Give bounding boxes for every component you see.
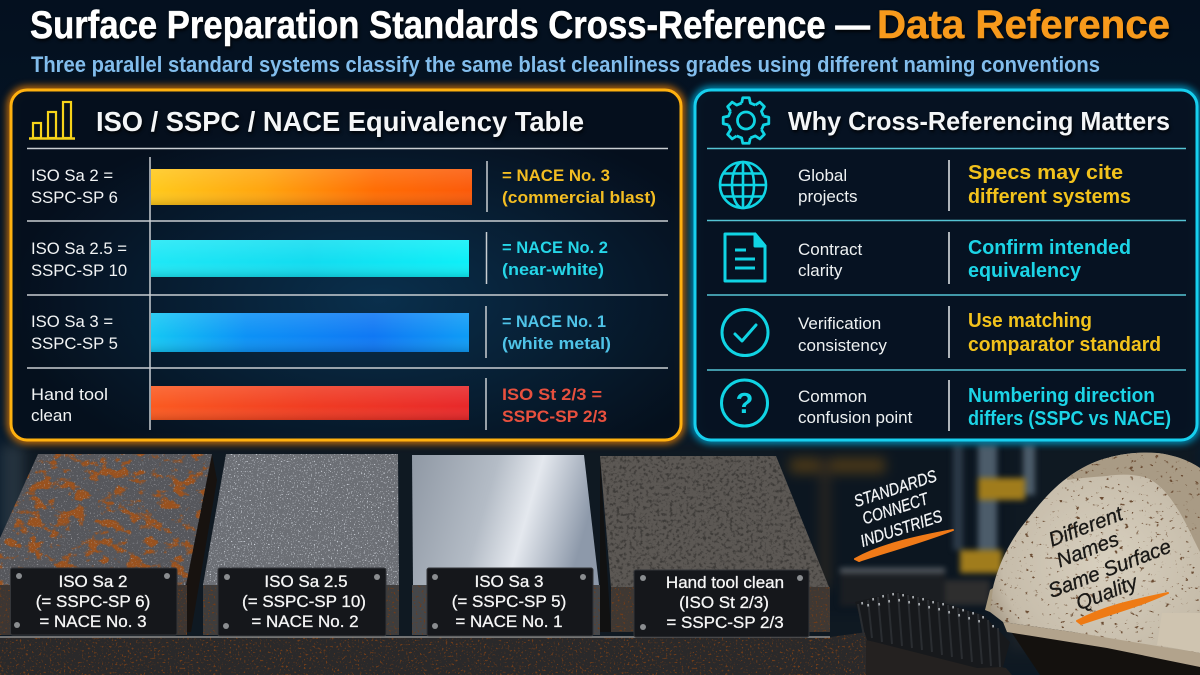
plate label: ISO Sa 3: ISO Sa 3 (475, 572, 543, 591)
wire brush (855, 592, 1012, 675)
panel heading: Why Cross-Referencing Matters (788, 106, 1170, 136)
row: ISO Sa 2.5: (near-white) (502, 260, 604, 279)
row: common confusion point: confusion point (798, 408, 913, 427)
panel: ISO / SSPC / NACE equivalency table (11, 90, 681, 440)
row: verification consistency: consistency (798, 336, 887, 355)
row: global projects: different systems (968, 186, 1131, 208)
plate label: hand tool clean: Hand tool clean (666, 573, 784, 592)
plate label: ISO Sa 3: = NACE No. 1 (455, 612, 563, 631)
row: common confusion point: Common (798, 387, 867, 406)
steel sample: hand tool clean (600, 456, 830, 632)
plate label: ISO Sa 2.5: (= SSPC-SP 10) (242, 592, 366, 611)
plate label: ISO Sa 3: (= SSPC-SP 5) (452, 592, 566, 611)
annotation: orange underline (855, 530, 953, 561)
row: ISO Sa 2: ISO Sa 2 = (31, 166, 113, 185)
row: contract clarity: Confirm intended (968, 237, 1131, 259)
row: ISO Sa 2.5 (31, 238, 608, 280)
row: global projects: Specs may cite (968, 162, 1123, 184)
hat brim (1003, 622, 1200, 667)
plate label: ISO Sa 2.5 (218, 568, 386, 636)
row: hand tool clean: SSPC-SP 2/3 (502, 407, 607, 426)
icon: bar chart (29, 102, 75, 138)
row: ISO Sa 2 (31, 166, 656, 207)
plate label: hand tool clean: (ISO St 2/3) (679, 593, 769, 612)
hat text: Quality (1073, 570, 1142, 615)
row: hand tool clean (31, 385, 607, 426)
row: common confusion point: Numbering direction (968, 385, 1155, 407)
icon: check circle (722, 310, 768, 356)
row: verification consistency: comparator standard (968, 334, 1161, 356)
hat text: Names (1053, 528, 1122, 572)
panel heading: ISO / SSPC / NACE Equivalency Table (96, 106, 584, 137)
row: global projects: projects (798, 187, 858, 206)
row: ISO Sa 2: SSPC-SP 6 (31, 188, 118, 207)
row: verification consistency: Verification (798, 314, 881, 333)
row: hand tool clean: ISO St 2/3 = (502, 385, 602, 404)
row: contract clarity: clarity (798, 261, 843, 280)
title: Surface Preparation Standards Cross-Reference — (30, 4, 870, 47)
hat text: Different (1045, 502, 1127, 552)
panel: why cross-referencing matters (695, 90, 1197, 440)
plate label: ISO Sa 2: (= SSPC-SP 6) (36, 592, 150, 611)
plate label: ISO Sa 2.5: = NACE No. 2 (251, 612, 359, 631)
blurred industrial background (0, 440, 1200, 675)
row: global projects: Global (798, 166, 847, 185)
row: global projects (720, 162, 1131, 208)
hat orange underline (1077, 593, 1168, 624)
row: contract clarity: Contract (798, 240, 863, 259)
plate label: ISO Sa 2: = NACE No. 3 (39, 612, 147, 631)
row: verification consistency: Use matching (968, 310, 1092, 332)
icon: document (725, 234, 765, 281)
panel frame: cyan glow (695, 90, 1197, 440)
row: ISO Sa 3: ISO Sa 3 = (31, 312, 113, 331)
hat text (1045, 502, 1174, 615)
row: common confusion point (722, 380, 1171, 430)
dark underside (1010, 630, 1200, 675)
plate label: hand tool clean (634, 570, 809, 637)
hat dome (990, 453, 1200, 653)
hat text: Same Surface (1045, 535, 1174, 603)
steel sample: ISO Sa 2 rusty (0, 454, 217, 635)
row: ISO Sa 2: (commercial blast) (502, 188, 656, 207)
subtitle: Three parallel standard systems classify the same blast cleanliness grades using different naming conventions (31, 52, 1100, 77)
row: ISO Sa 2.5: SSPC-SP 10 (31, 261, 127, 280)
plate label: ISO Sa 3 (427, 568, 593, 636)
steel sample: ISO Sa 2.5 (203, 454, 399, 635)
row: ISO Sa 3: SSPC-SP 5 (31, 334, 118, 353)
annotation: standards connect industries: CONNECT (860, 489, 932, 528)
hat ridge (1067, 453, 1200, 552)
icon: question circle (722, 380, 768, 426)
row: ISO Sa 2.5: ISO Sa 2.5 = (31, 239, 127, 258)
icon: question circle: ? (736, 388, 753, 420)
row: ISO Sa 2.5: = NACE No. 2 (502, 238, 608, 257)
icon: gear (723, 98, 769, 143)
hat strap clip (985, 588, 993, 612)
plate label: ISO Sa 2 (10, 568, 177, 635)
hard hat (985, 453, 1200, 675)
hat side block (1157, 613, 1200, 653)
annotation: standards connect industries: STANDARDS (851, 466, 940, 511)
row: verification consistency (722, 310, 1161, 356)
annotation: standards connect industries (851, 466, 945, 551)
plate label: ISO Sa 2: ISO Sa 2 (59, 572, 127, 591)
row: hand tool clean: clean (31, 406, 72, 425)
icon: globe (720, 162, 766, 208)
annotation: standards connect industries: INDUSTRIES (858, 506, 945, 551)
panel frame: amber glow (11, 90, 681, 440)
row: ISO Sa 3: (white metal) (502, 334, 611, 353)
row: contract clarity (725, 234, 1131, 282)
row: contract clarity: equivalency (968, 260, 1082, 282)
plate label: hand tool clean: = SSPC-SP 2/3 (666, 613, 784, 632)
row: ISO Sa 3 (31, 312, 611, 353)
title: Data Reference (877, 3, 1170, 47)
steel sample: ISO Sa 3 (412, 455, 600, 635)
steel base rail (0, 632, 867, 675)
row: ISO Sa 2: = NACE No. 3 (502, 166, 610, 185)
row: ISO Sa 3: = NACE No. 1 (502, 312, 606, 331)
row: hand tool clean: Hand tool (31, 385, 108, 404)
row: common confusion point: differs (SSPC vs NACE) (968, 408, 1171, 430)
plate label: ISO Sa 2.5: ISO Sa 2.5 (264, 572, 348, 591)
